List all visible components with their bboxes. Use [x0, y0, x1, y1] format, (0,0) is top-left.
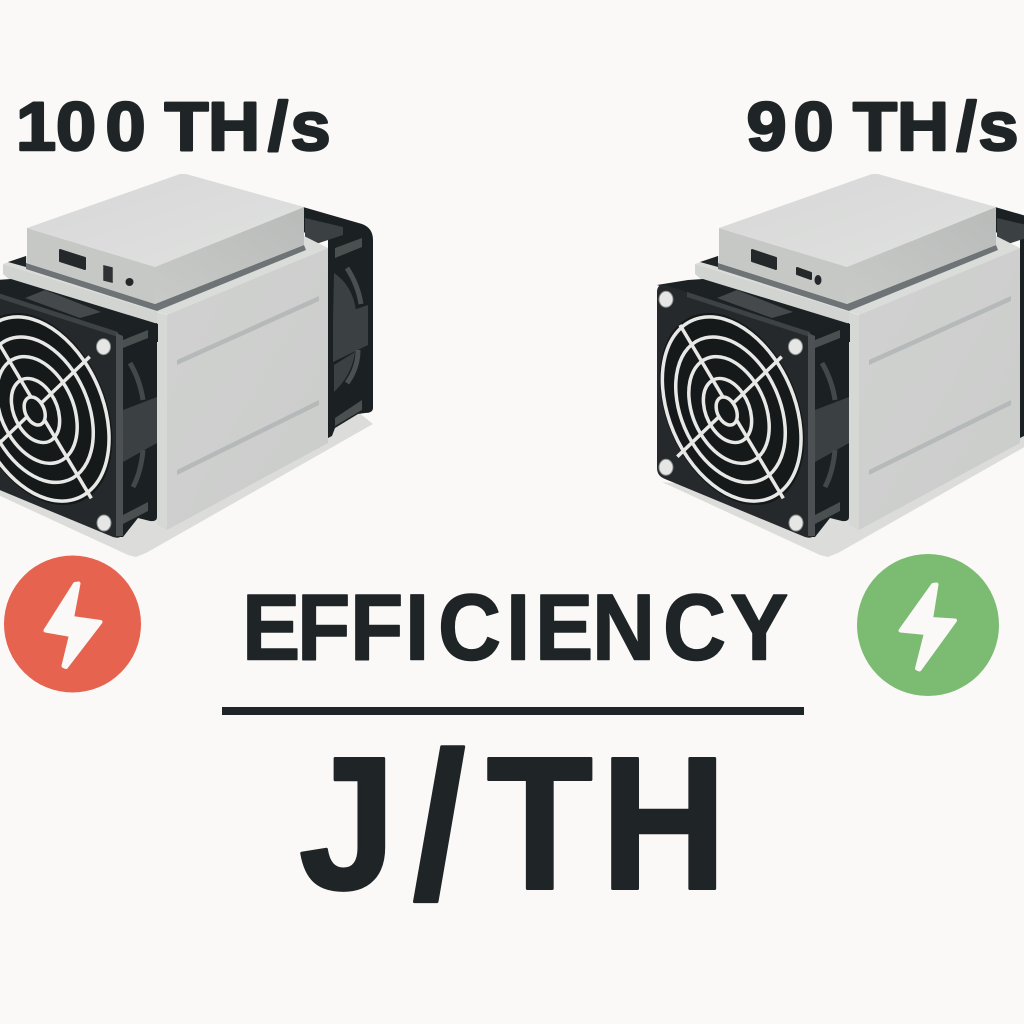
front fan: [653, 279, 850, 538]
shadow: [662, 412, 1024, 557]
fan grille: [0, 299, 116, 519]
title: EFFICIENCY: EFFICIENCY: [242, 576, 788, 680]
ports: [60, 250, 134, 286]
fan frame: [0, 285, 123, 538]
fan housing top: [657, 279, 850, 342]
fan opening: [0, 294, 119, 524]
top box: [26, 174, 306, 311]
screws: [659, 291, 803, 531]
fan housing side: [117, 323, 157, 537]
fan housing top: [0, 279, 158, 342]
icon: red lightning bolt badge: [4, 556, 141, 692]
heading: 100 TH/s: 100 TH/s: [16, 87, 331, 165]
side vents: [869, 296, 1011, 475]
heading: 90 TH/s: 90 TH/s: [747, 87, 1019, 165]
screws: [0, 291, 111, 531]
side vents: [177, 296, 319, 475]
top box: [718, 174, 998, 311]
unit: J/TH: /: [413, 710, 466, 942]
miner: right 90 TH/s: [653, 174, 1024, 557]
unit: J/TH: T: [487, 719, 593, 929]
front fan: [0, 279, 158, 538]
chassis: [695, 236, 1020, 530]
fraction bar: [222, 707, 804, 715]
fan grille: [656, 299, 808, 519]
fan opening: [653, 294, 811, 524]
fan frame: [657, 285, 815, 538]
unit: J/TH: H: [601, 719, 727, 929]
ports: [752, 250, 822, 285]
unit: J/TH: J: [299, 719, 396, 929]
miner: left 100 TH/s: [0, 174, 373, 557]
rear fan: [303, 207, 373, 438]
fan housing side: [809, 323, 849, 537]
shadow: [0, 412, 373, 557]
chassis: [3, 236, 328, 530]
rear fan: [995, 207, 1024, 438]
icon: green lightning bolt badge: [857, 554, 999, 696]
